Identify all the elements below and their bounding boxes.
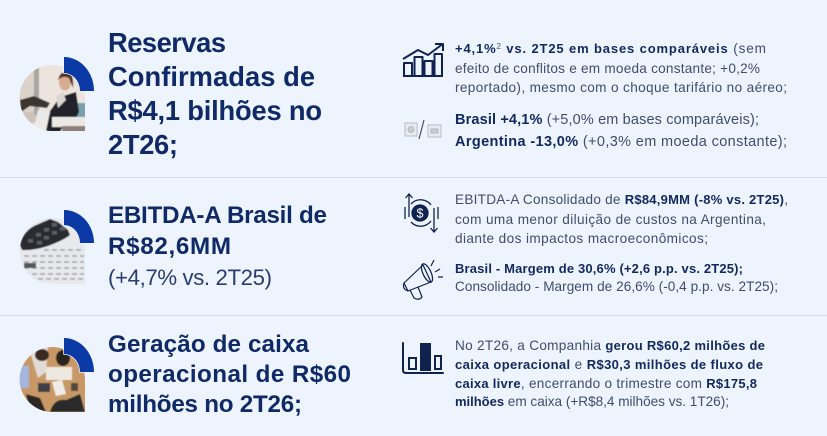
icon: megaphone <box>404 260 443 299</box>
heading: operational cash generation: milhões no 2T26; <box>108 391 302 418</box>
text: cash flow <box>455 338 765 409</box>
text: margins <box>455 261 778 294</box>
heading: reservas confirmadas: 2T26; <box>108 129 178 160</box>
text: consolidated EBITDA: com uma menor diluição de custos na Argentina, <box>455 212 766 227</box>
text: comparable basis growth: 2 <box>497 42 502 51</box>
text: margins: Consolidado - Margem de 26,6% (-0,4 p.p. vs. 2T25); <box>455 279 778 294</box>
text: margins: Brasil - Margem de 30,6% (+2,6 p.p. vs. 2T25); <box>455 261 743 276</box>
text: cash flow: caixa livre, encerrando o trimestre com R$175,8 <box>455 376 757 391</box>
heading: operational cash generation: operacional de R$60 <box>108 361 351 388</box>
text: cash flow: No 2T26, a Companhia gerou R$60,2 milhões de <box>455 338 765 353</box>
heading: operational cash generation <box>108 331 351 418</box>
icon: dollar coin with arrows: $ <box>417 206 424 220</box>
text: consolidated EBITDA: diante dos impactos macroeconômicos; <box>455 231 708 246</box>
text: comparable basis growth: vs. 2T25 em bases comparáveis <box>502 41 728 56</box>
text: Brasil and Argentina: Brasil +4,1% (+5,0% em bases comparáveis); <box>455 112 759 128</box>
text: comparable basis growth: +4,1% <box>455 41 496 56</box>
text: cash flow: caixa operacional e R$30,3 milhões de fluxo de <box>455 357 763 372</box>
text: comparable basis growth <box>455 41 787 95</box>
photo: businesswoman at desk <box>19 57 94 132</box>
text: Brasil and Argentina <box>455 112 787 150</box>
heading: EBITDA-A Brasil: R$82,6MM <box>108 233 231 260</box>
text: comparable basis growth: reportado), mesmo com o choque tarifário no aéreo; <box>455 80 787 95</box>
icon: flags of Brazil and Argentina <box>405 120 441 139</box>
heading: operational cash generation: Geração de caixa <box>108 331 310 358</box>
icon: dollar coin with arrows <box>405 194 438 232</box>
text: comparable basis growth: (sem <box>733 41 766 56</box>
text: consolidated EBITDA: EBITDA-A Consolidado de R$84,9MM (-8% vs. 2T25), <box>455 192 788 207</box>
text: cash flow: milhões em caixa (+R$8,4 milhões vs. 1T26); <box>455 394 729 409</box>
heading: reservas confirmadas: Confirmadas de <box>108 61 315 92</box>
text: Brasil and Argentina: Argentina -13,0% (+0,3% em moeda constante); <box>455 134 787 150</box>
heading: EBITDA-A Brasil: (+4,7% vs. 2T25) <box>108 265 272 290</box>
icon: rising bar chart with arrow <box>403 44 443 76</box>
text: consolidated EBITDA <box>455 192 788 246</box>
heading: EBITDA-A Brasil: EBITDA-A Brasil de <box>108 202 327 229</box>
heading: reservas confirmadas <box>108 27 322 160</box>
heading: EBITDA-A Brasil <box>108 202 327 290</box>
photo: calculator and spreadsheet <box>19 210 94 285</box>
icon: bar chart <box>403 343 443 373</box>
heading: reservas confirmadas: Reservas <box>108 27 226 58</box>
heading: reservas confirmadas: R$4,1 bilhões no <box>108 95 322 126</box>
photo: team meeting around table <box>19 338 94 413</box>
text: comparable basis growth: efeito de conflitos e em moeda constante; +0,2% <box>455 61 760 76</box>
